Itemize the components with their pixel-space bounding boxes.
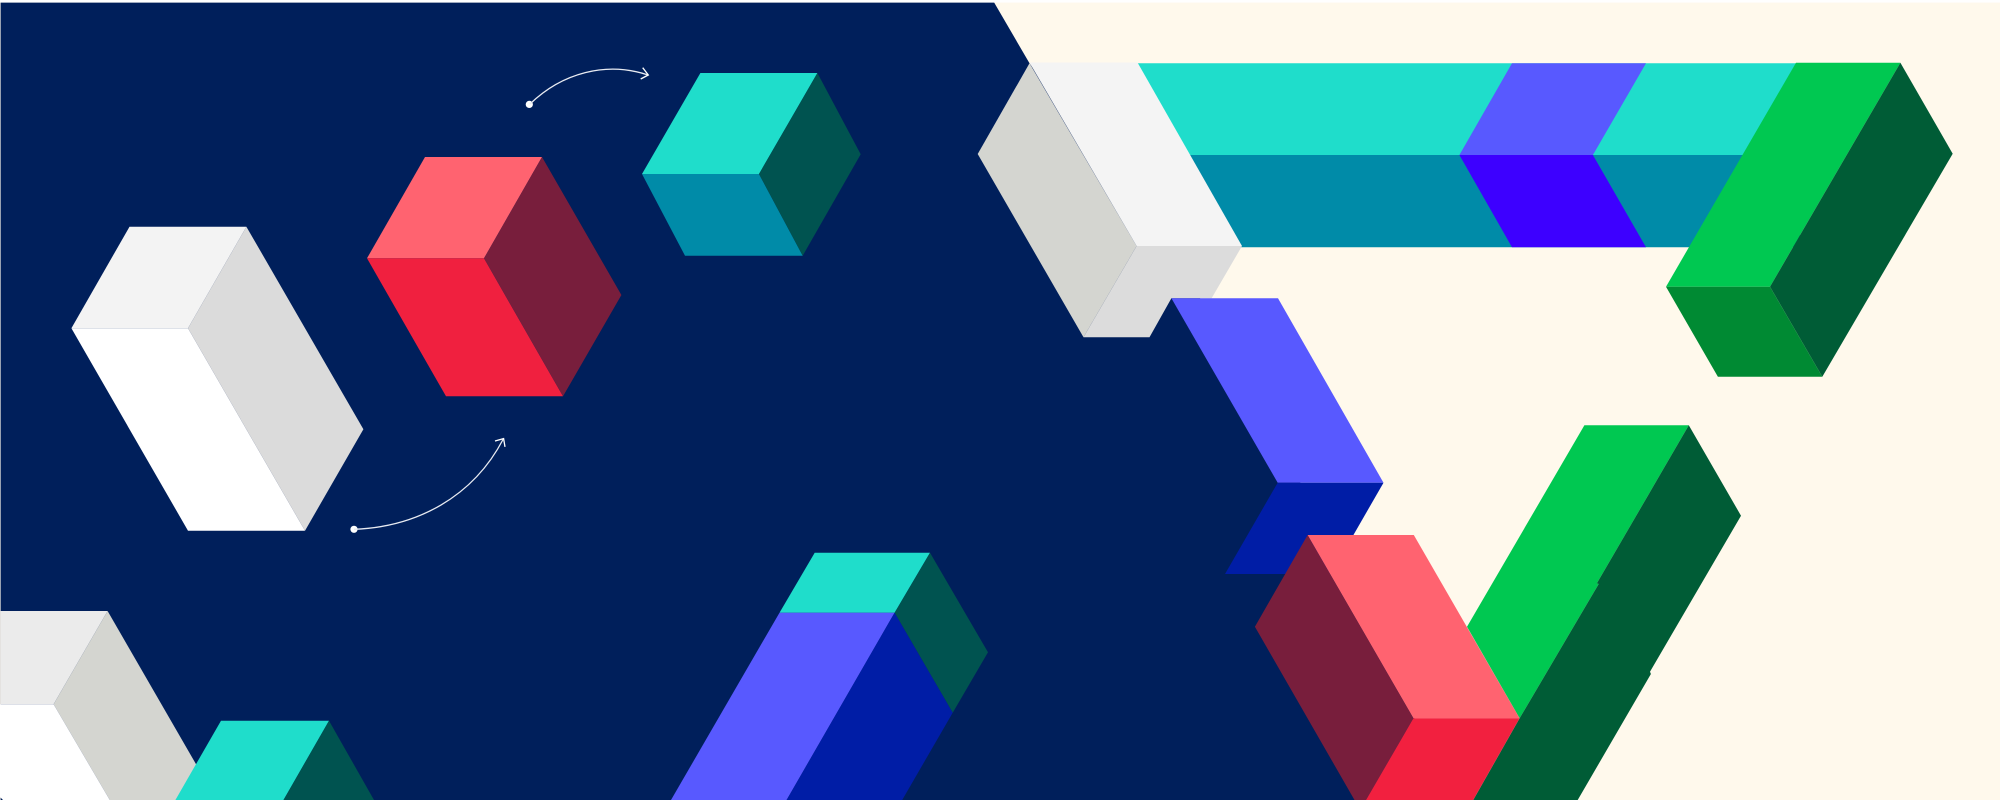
block: bottom-left teal cube xyxy=(175,721,374,800)
block: centre teal and purple column xyxy=(671,553,988,800)
arrow: lower curved arrow xyxy=(350,439,505,533)
block: grey end cap xyxy=(978,62,1242,337)
background: navy panel xyxy=(1,3,1454,800)
block: white cube xyxy=(71,227,363,531)
arrow: upper curved arrow xyxy=(526,68,648,108)
block: teal cube xyxy=(642,73,861,256)
block: bottom-left white cube xyxy=(0,611,217,800)
block: lower-right red column xyxy=(1255,535,1520,800)
block: red cube xyxy=(367,157,621,396)
block: horizontal striped bar xyxy=(1138,63,1800,247)
block: purple and blue column xyxy=(1171,298,1384,574)
block: lower-right green column xyxy=(1467,425,1741,800)
block: top-right green bar xyxy=(1666,63,1953,377)
